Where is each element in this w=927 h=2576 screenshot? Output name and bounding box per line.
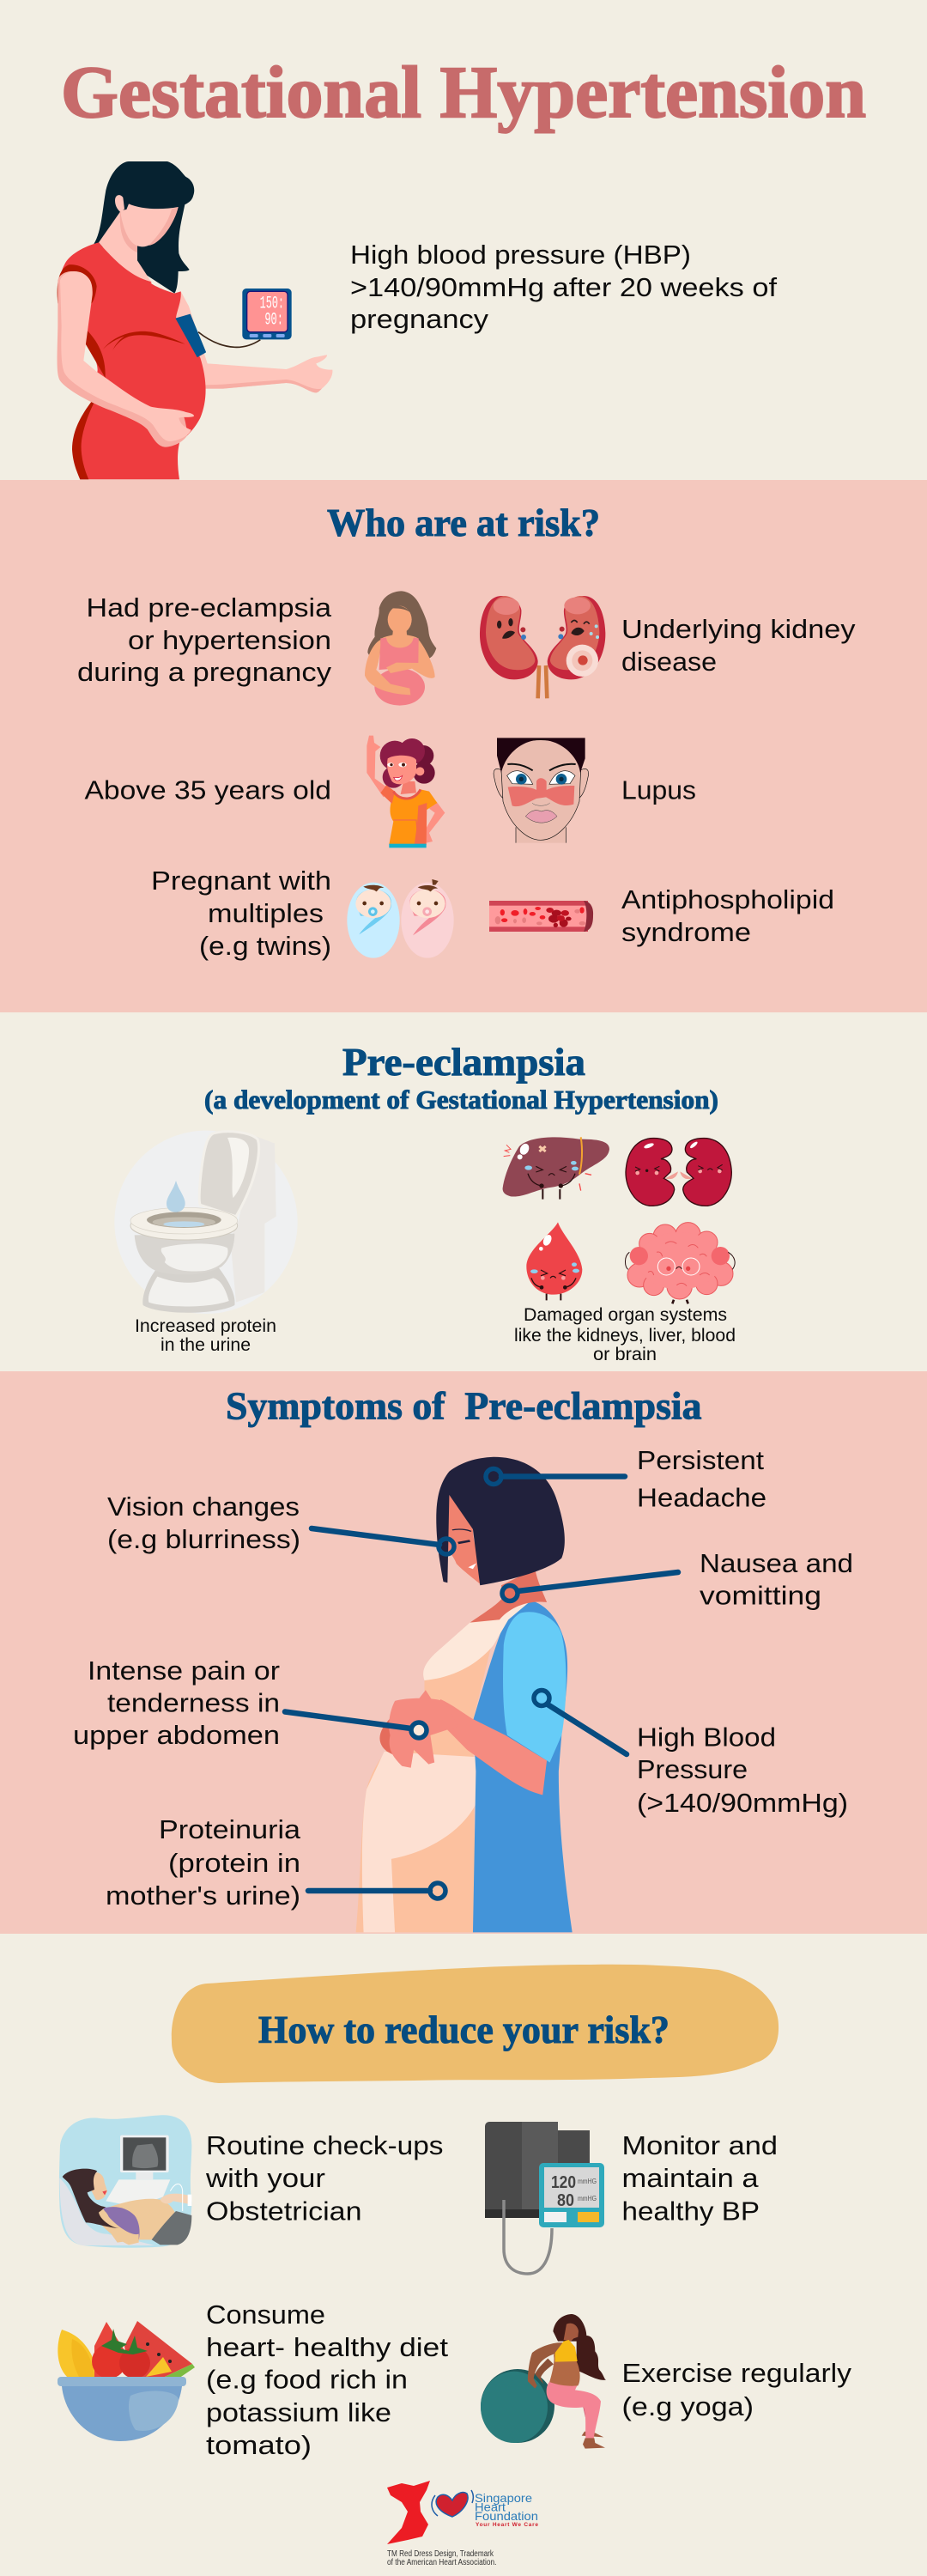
caption: increased protein <box>135 1316 276 1355</box>
text: heart-healthy diet <box>206 2300 449 2460</box>
definition text: pregnancy <box>350 305 489 334</box>
trademark note: TM Red Dress Design, Trademark <box>387 2549 494 2559</box>
icon: blood drop <box>526 1222 582 1300</box>
icon: fruit bowl <box>58 2321 195 2441</box>
icons: pregnant woman, kidneys, waving woman, lupus face <box>365 591 605 848</box>
trademark note <box>387 2549 496 2567</box>
text: exercise regularly: (e.g yoga) <box>621 2392 754 2421</box>
icon: blood pressure monitor: mmHG <box>578 2178 597 2185</box>
illustration: pregnant woman with blood pressure monitor <box>58 161 332 479</box>
icon: blood pressure monitor <box>485 2122 604 2274</box>
title: Gestational Hypertension <box>61 51 866 133</box>
logo: red dress <box>387 2481 430 2544</box>
definition text <box>350 240 778 334</box>
text: heart-healthy diet: Consume <box>206 2300 325 2330</box>
callout: vision changes: (e.g blurriness) <box>107 1525 300 1554</box>
text: routine check-ups: with your <box>205 2164 325 2193</box>
text: monitor BP <box>621 2131 778 2226</box>
callout: vision changes <box>107 1492 454 1554</box>
callout: high blood pressure: High Blood <box>637 1722 776 1752</box>
text: routine check-ups <box>205 2131 444 2226</box>
callout: upper abdomen pain: Intense pain or <box>88 1656 280 1686</box>
icon: lupus face <box>494 738 589 843</box>
callout: vision changes: Vision changes <box>107 1492 300 1522</box>
text: pre-eclampsia history <box>77 593 332 687</box>
icon: blood pressure monitor: 80 <box>557 2191 574 2210</box>
text: pre-eclampsia history: Had pre-eclampsia <box>86 593 331 623</box>
text: routine check-ups: Obstetrician <box>206 2196 362 2226</box>
panel: who are at risk <box>0 480 927 1012</box>
icon: toilet <box>114 1131 298 1314</box>
text: antiphospholipid syndrome: Antiphospholipid <box>621 885 834 914</box>
panel: how to reduce your risk <box>58 1965 852 2567</box>
panel: symptoms of pre-eclampsia <box>0 1371 927 1934</box>
callout: persistent headache: Headache <box>637 1484 766 1513</box>
definition text: High blood pressure (HBP) <box>350 240 691 270</box>
icon: blood pressure monitor: mmHG <box>578 2195 597 2202</box>
cuff <box>176 314 205 356</box>
text: pre-eclampsia history: during a pregnancy <box>77 658 332 687</box>
callout: high blood pressure: Pressure <box>637 1755 748 1784</box>
text: pregnant with multiples: (e.g twins) <box>199 932 331 961</box>
monitor: 90: <box>264 310 283 330</box>
callout: high blood pressure <box>534 1690 848 1818</box>
text: underlying kidney disease: disease <box>621 647 717 677</box>
text: lupus: Lupus <box>621 776 696 805</box>
callout: upper abdomen pain: tenderness in <box>107 1688 280 1717</box>
caption: increased protein: Increased protein <box>135 1316 276 1336</box>
text: underlying kidney disease: Underlying kidney <box>621 615 856 644</box>
heading: pre-eclampsia: Pre-eclampsia <box>342 1041 585 1084</box>
logo: singapore heart foundation <box>432 2490 538 2528</box>
icon: kidneys <box>480 596 605 698</box>
text: pregnant with multiples: multiples <box>208 899 324 928</box>
text: above 35 years old: Above 35 years old <box>84 776 331 805</box>
icon: blood vessel with clot <box>489 901 593 932</box>
icon: ultrasound check-up <box>59 2115 191 2248</box>
text: heart-healthy diet: (e.g food rich in <box>206 2365 408 2394</box>
text: pregnant with multiples <box>151 866 331 961</box>
caption: damaged organ systems: or brain <box>593 1345 657 1364</box>
trademark note: of the American Heart Association. <box>387 2558 496 2567</box>
subheading: (a development of Gestational Hypertension) <box>204 1084 718 1115</box>
text: pre-eclampsia history: or hypertension <box>128 626 331 655</box>
icon: exercise ball yoga <box>481 2314 606 2449</box>
monitor: 150: <box>260 294 284 313</box>
icons: damaged organs <box>503 1137 735 1303</box>
text: exercise regularly <box>621 2359 852 2421</box>
callout: nausea and vomitting: Nausea and <box>700 1549 853 1578</box>
icon: waving woman <box>367 736 445 848</box>
panel: pre-eclampsia <box>114 1041 736 1364</box>
icon: brain <box>625 1223 735 1303</box>
callout: proteinuria: (protein in <box>168 1849 300 1878</box>
definition text: >140/90mmHg after 20 weeks of <box>350 273 778 302</box>
callout: proteinuria: Proteinuria <box>159 1815 300 1844</box>
heading: who are at risk: Who are at risk? <box>327 501 600 544</box>
caption: damaged organ systems <box>514 1305 736 1364</box>
text: monitor BP: Monitor and <box>621 2131 778 2160</box>
heading: symptoms: Symptoms of Pre-eclampsia <box>226 1384 702 1427</box>
logo: singapore heart foundation: Foundation <box>475 2509 538 2523</box>
text: antiphospholipid syndrome <box>621 885 834 947</box>
text: monitor BP: maintain a <box>621 2164 759 2193</box>
text: heart-healthy diet: potassium like <box>206 2398 391 2427</box>
callout: high blood pressure: (>140/90mmHg) <box>637 1789 848 1818</box>
icon: kidneys <box>626 1139 731 1206</box>
caption: damaged organ systems: like the kidneys, liver, blood <box>514 1326 736 1346</box>
logo: singapore heart foundation: Heart <box>475 2500 506 2514</box>
heading banner <box>172 1965 779 2083</box>
callout: upper abdomen pain: upper abdomen <box>73 1721 280 1750</box>
callout: persistent headache: Persistent <box>637 1446 765 1475</box>
icon: twin babies <box>347 879 454 958</box>
text: underlying kidney disease <box>621 615 856 677</box>
callout: nausea and vomitting <box>502 1549 853 1611</box>
text: antiphospholipid syndrome: syndrome <box>621 918 751 947</box>
text: heart-healthy diet: tomato) <box>206 2431 312 2460</box>
heading banner: How to reduce your risk? <box>258 2008 670 2051</box>
logo: singapore heart foundation: Your Heart We Care <box>476 2522 538 2528</box>
caption: damaged organ systems: Damaged organ systems <box>524 1305 727 1325</box>
monitor <box>242 289 292 339</box>
panel: definition <box>58 161 778 479</box>
text: pregnant with multiples: Pregnant with <box>151 866 331 896</box>
icon: blood pressure monitor: 120 <box>551 2173 576 2192</box>
icon: pregnant woman <box>365 591 436 706</box>
callout: upper abdomen pain <box>73 1656 427 1750</box>
callout: nausea and vomitting: vomitting <box>700 1582 821 1611</box>
icons: twin babies and blood vessel <box>347 879 593 958</box>
illustration: pregnant woman side view <box>356 1457 573 1932</box>
text: exercise regularly: Exercise regularly <box>621 2359 852 2388</box>
callout: proteinuria: mother's urine) <box>106 1881 300 1911</box>
text: routine check-ups: Routine check-ups <box>206 2131 443 2160</box>
callout: persistent headache <box>486 1446 766 1513</box>
logo: singapore heart foundation: Singapore <box>475 2491 532 2505</box>
text: monitor BP: healthy BP <box>621 2196 760 2226</box>
caption: increased protein: in the urine <box>161 1335 251 1355</box>
icon: liver <box>503 1137 609 1200</box>
text: heart-healthy diet: heart- healthy diet <box>206 2333 449 2362</box>
callout: proteinuria <box>106 1815 445 1911</box>
